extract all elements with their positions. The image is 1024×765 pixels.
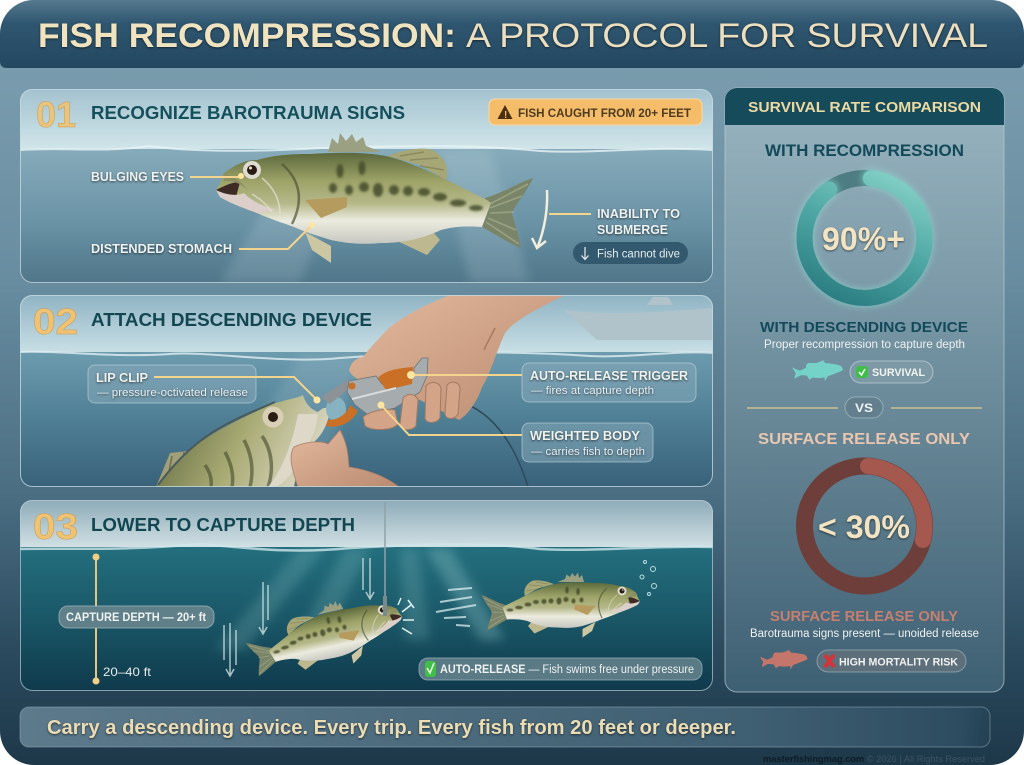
badge: auto-release: AUTO-RELEASE — Fish swims free under pressure: [440, 664, 694, 676]
takeaway banner: [20, 707, 990, 747]
callout: inability to submerge: SUBMERGE: [597, 222, 668, 237]
callout: weighted body: [378, 402, 653, 462]
descent arrows: [224, 558, 374, 676]
alert badge: fish caught from 20+ feet: FISH CAUGHT FROM 20+ FEET: [518, 106, 692, 120]
illustration: hand gripping device: [349, 295, 565, 420]
callout: auto-release trigger: AUTO-RELEASE TRIGGER: [530, 368, 689, 383]
callout: weighted body: — carries fish to depth: [531, 446, 645, 458]
illustration: fish descending on clip: [241, 588, 410, 685]
badge: survival: SURVIVAL: [872, 367, 925, 379]
illustration: released fish swimming free: [482, 572, 640, 638]
caption: with descending device: WITH DESCENDING DEVICE: [760, 319, 968, 336]
donut chart: 90%+: [804, 178, 925, 298]
panel: step 2 attach descending device: [20, 295, 713, 487]
depth range label: 20–40 ft: [103, 665, 152, 679]
panel: survival rate comparison: [725, 88, 1004, 692]
illustration: boat on the horizon: [564, 297, 713, 340]
step heading: ATTACH DESCENDING DEVICE: [91, 310, 372, 330]
step number 01: 01: [36, 94, 76, 135]
takeaway banner: Carry a descending device. Every trip. Every fish from 20 feet or deeper.: [47, 717, 736, 739]
panel header: [725, 88, 1004, 125]
heading: with recompression: WITH RECOMPRESSION: [765, 141, 964, 160]
callout: auto-release trigger: — fires at capture depth: [531, 385, 654, 397]
alert badge: fish caught from 20+ feet: [489, 99, 702, 125]
label: capture depth: [59, 606, 214, 628]
illustration: fingers around device: [363, 382, 460, 430]
callout: bulging eyes: [91, 169, 244, 184]
depth scale: [92, 554, 152, 684]
caption: surface release only: [750, 609, 979, 640]
arrow: fish cannot dive: [532, 190, 547, 248]
icon: distressed fish: [760, 650, 808, 669]
caption: surface release only: Barotrauma signs present — unoided release: [750, 628, 979, 640]
bubbles: [640, 560, 656, 596]
divider: vs: [747, 397, 982, 418]
panel: step 1 recognize barotrauma signs: [20, 89, 713, 283]
step heading: RECOGNIZE BAROTRAUMA SIGNS: [91, 103, 405, 123]
callout: lip clip: — pressure-octivated release: [97, 387, 248, 399]
callout: inability to submerge: [549, 206, 680, 237]
icon: healthy fish: [792, 360, 843, 381]
device release sparks: [383, 596, 414, 634]
alert badge: fish caught from 20+ feet: !: [504, 110, 507, 121]
callout: inability to submerge: INABILITY TO: [597, 206, 680, 221]
callout: bulging eyes: BULGING EYES: [91, 169, 184, 184]
callout: weighted body: WEIGHTED BODY: [530, 428, 640, 443]
pill: fish cannot dive: Fish cannot dive: [597, 248, 680, 260]
divider: vs: VS: [855, 401, 873, 415]
illustration: bass with barotrauma: [216, 133, 533, 263]
title: A PROTOCOL FOR SURVIVAL: [466, 17, 988, 55]
footer credit: masterfishingmag.com © 2026 | All Rights Reserved: [763, 754, 985, 764]
panel header: SURVIVAL RATE COMPARISON: [748, 100, 981, 116]
title: [38, 17, 988, 55]
callout: auto-release trigger: [407, 363, 696, 402]
caption: with descending device: Proper recompression to capture depth: [764, 339, 965, 351]
callout: lip clip: [88, 365, 320, 404]
title: FISH RECOMPRESSION:: [38, 17, 456, 55]
step number 03: 03: [33, 506, 78, 547]
donut chart: under 30%: [804, 466, 924, 586]
caption: surface release only: SURFACE RELEASE ONLY: [770, 609, 958, 625]
badge: high mortality risk: [817, 650, 966, 672]
badge: auto-release: [419, 658, 702, 680]
donut chart: under 30%: < 30%: [818, 509, 910, 545]
caption: with descending device: [760, 319, 968, 351]
donut chart: 90%+: 90%+: [822, 221, 905, 257]
descending line: [384, 502, 386, 615]
badge: high mortality risk: HIGH MORTALITY RISK: [839, 656, 958, 668]
step heading: LOWER TO CAPTURE DEPTH: [91, 515, 355, 535]
pill: fish cannot dive: [573, 242, 688, 264]
panel: step 3 lower to capture depth: [20, 500, 713, 691]
callout: distended stomach: DISTENDED STOMACH: [91, 241, 232, 256]
header banner: [0, 0, 1024, 68]
callout: lip clip: LIP CLIP: [96, 370, 148, 385]
illustration: supporting hand: [291, 430, 399, 487]
label: capture depth: CAPTURE DEPTH — 20+ ft: [66, 610, 206, 624]
speed lines: [436, 588, 476, 626]
illustration: descending device: [321, 358, 428, 427]
illustration: fish held at the lip: [156, 395, 330, 487]
heading: surface release only: SURFACE RELEASE ONLY: [758, 431, 970, 448]
step number 02: 02: [33, 301, 78, 342]
badge: survival: [850, 361, 933, 383]
callout: distended stomach: [91, 222, 315, 256]
